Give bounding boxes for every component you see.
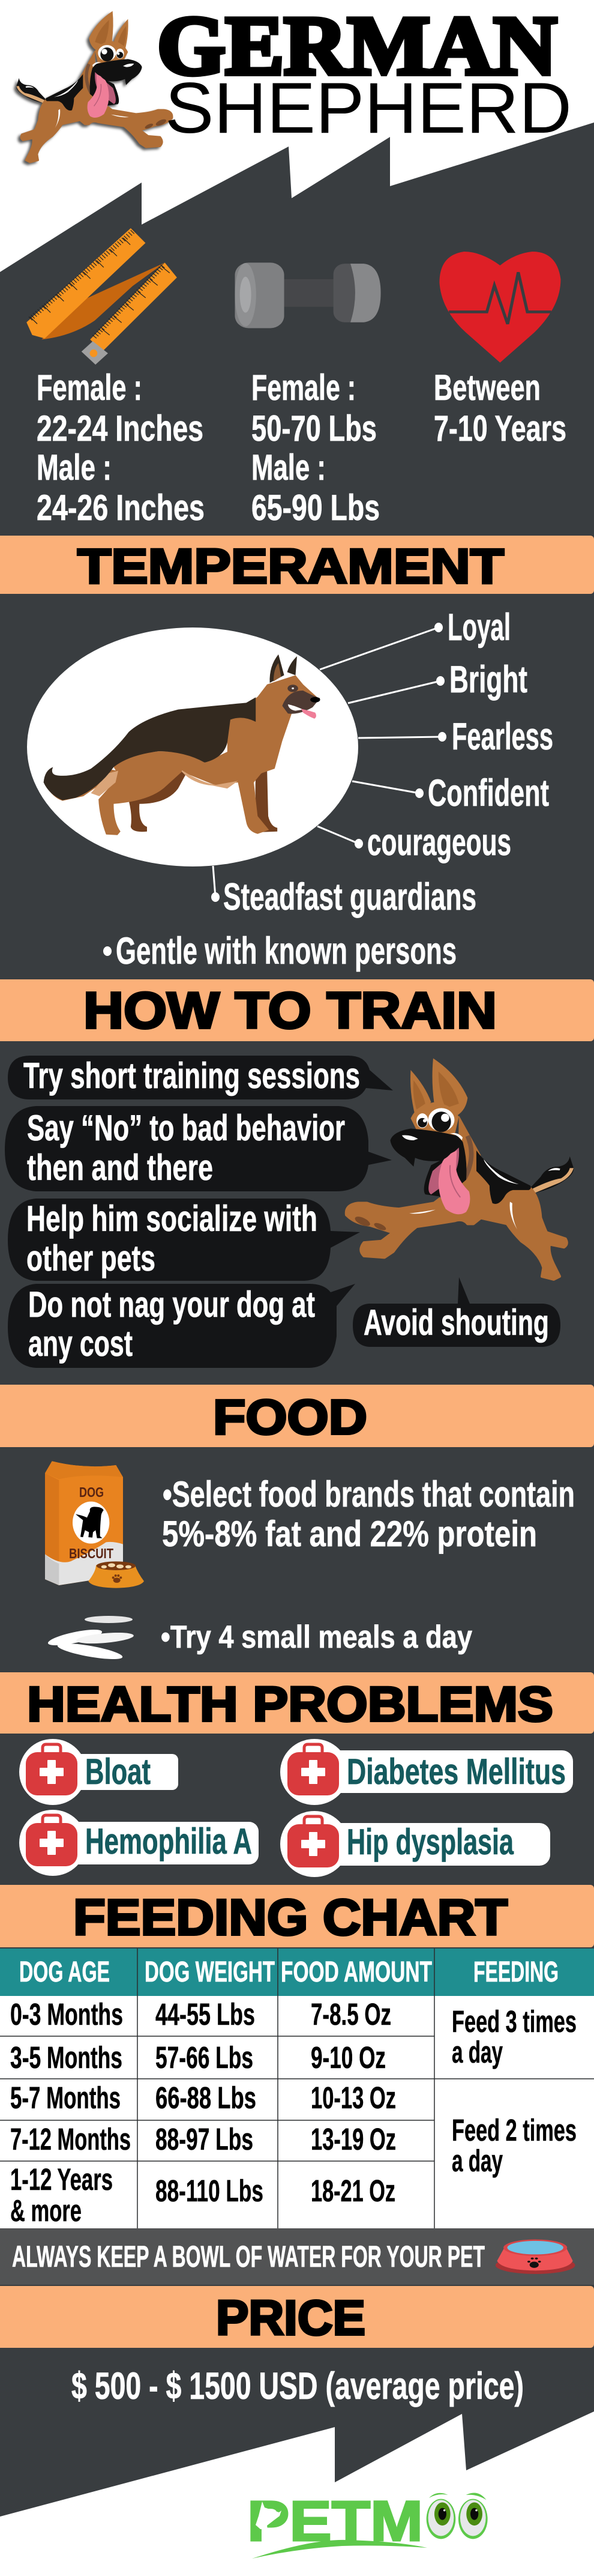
heading band: feeding chart: FEEDING CHART [73,1889,508,1946]
tip bubble: short sessions: Try short training sessions [23,1056,360,1096]
title [157,0,572,148]
traits [116,606,553,972]
traits: Steadfast guardians [223,876,476,918]
icon: heart with pulse [439,252,560,363]
dog silhouette in p [256,2502,281,2529]
icon: dumbbell [235,262,381,328]
table rows: 7-12 Months [10,2122,131,2156]
tip bubble: say no: Say “No” to bad behavior [27,1108,345,1148]
eyes [427,2493,488,2539]
table header: DOG WEIGHT [145,1956,275,1988]
traits: Bright [449,659,527,701]
table rows: 10-13 Oz [311,2081,396,2115]
heading band: food: FOOD [213,1390,367,1445]
heading band: price [0,2286,594,2348]
traits: Gentle with known persons [116,930,457,972]
heading band: food [0,1385,594,1447]
white ellipse [27,627,358,866]
table header: FOOD AMOUNT [281,1956,432,1988]
height text: 24-26 Inches [37,488,205,528]
table rows: 66-88 Lbs [155,2081,256,2115]
table rows: 44-55 Lbs [155,1997,255,2031]
logo: petmoo: PETM [247,2490,423,2553]
pill: bloat: Bloat [85,1752,151,1792]
panel: price [0,2286,594,2407]
table rows: a day [452,2035,503,2069]
panel: feeding chart [0,1885,594,2285]
weight text: Male : [251,447,326,488]
table rows: 9-10 Oz [311,2040,386,2075]
meals tip text: •Try 4 small meals a day [161,1619,472,1655]
label: bag text: BISCUIT [69,1546,113,1561]
table rows: 57-66 Lbs [155,2040,253,2075]
traits: courageous [367,821,511,863]
panel: health problems [0,1672,594,1877]
table rows: 0-3 Months [10,1997,123,2031]
table header: DOG AGE [19,1956,110,1988]
table rows: 88-110 Lbs [155,2174,263,2208]
traits: Loyal [448,606,511,649]
cartoon dog logo [16,11,172,162]
logo: petmoo [247,2490,488,2559]
icon: water bowl [496,2240,575,2274]
pill: hemophilia a [19,1810,259,1876]
table rows: 7-8.5 Oz [311,1997,391,2031]
tip bubble: do not nag: Do not nag your dog at [28,1284,315,1325]
height text [37,367,205,528]
panel: temperament [0,536,594,972]
label: bag text: DOG [79,1484,104,1500]
height text: 22-24 Inches [37,408,203,449]
tip bubble: socialize: other pets [26,1238,155,1278]
lifespan text: Between [434,367,541,408]
icon: rice grains [47,1616,134,1662]
table [0,1949,594,2228]
table rows: 18-21 Oz [311,2174,395,2208]
weight text: 65-90 Lbs [251,488,380,528]
food tip text [162,1474,575,1554]
heading band: price: PRICE [216,2291,365,2345]
table rows: a day [452,2144,503,2178]
heading band: how to train [0,979,594,1041]
table rows [10,1997,577,2228]
cartoon dog running [346,1059,574,1279]
table rows: 1-12 Years [10,2162,113,2197]
tip bubble: do not nag: any cost [28,1323,133,1364]
pill: hip dysplasia: Hip dysplasia [347,1822,514,1862]
pill: bloat [19,1739,178,1805]
panel: how to train [0,979,594,1368]
weight text: 50-70 Lbs [251,408,377,449]
connector lines [103,623,446,956]
heading band: health problems: HEALTH PROBLEMS [27,1677,553,1732]
table rows: 3-5 Months [10,2040,122,2075]
pill: hip dysplasia [280,1811,550,1877]
tip bubble: say no [5,1106,392,1191]
water reminder strip [0,2228,594,2285]
tip bubble: socialize: Help him socialize with [26,1199,317,1239]
height text: Male : [37,447,112,488]
icon: measuring tape [26,228,177,364]
weight text [251,367,380,528]
icon: food bowl [88,1561,144,1588]
table rows: & more [10,2194,82,2228]
height text: Female : [37,367,142,408]
tip bubble: do not nag [8,1284,355,1368]
pill: diabetes mellitus [280,1739,573,1805]
tip bubble: avoid shouting [353,1277,560,1347]
illustration: standing german shepherd [44,655,320,835]
label: bag text [69,1484,113,1561]
table header [0,1949,594,1996]
heading band: feeding chart [0,1885,594,1947]
pill: hemophilia a: Hemophilia A [85,1821,252,1861]
title: SHEPHERD [165,68,572,148]
tip bubble: socialize [8,1199,360,1281]
table rows: 5-7 Months [10,2081,121,2115]
swoosh [252,2540,427,2559]
table rows: 88-97 Lbs [155,2122,253,2156]
heading band: how to train: HOW TO TRAIN [83,982,497,1039]
heading band: temperament [0,536,594,594]
weight text: Female : [251,367,356,408]
panel: food [0,1385,594,1662]
table rows: 13-19 Oz [311,2122,396,2156]
lifespan text [434,367,566,449]
title: GERMAN [157,0,557,92]
icon: dog biscuit bag [45,1461,123,1585]
tip bubble: say no: then and there [27,1147,213,1188]
heading band: temperament: TEMPERAMENT [77,539,504,594]
